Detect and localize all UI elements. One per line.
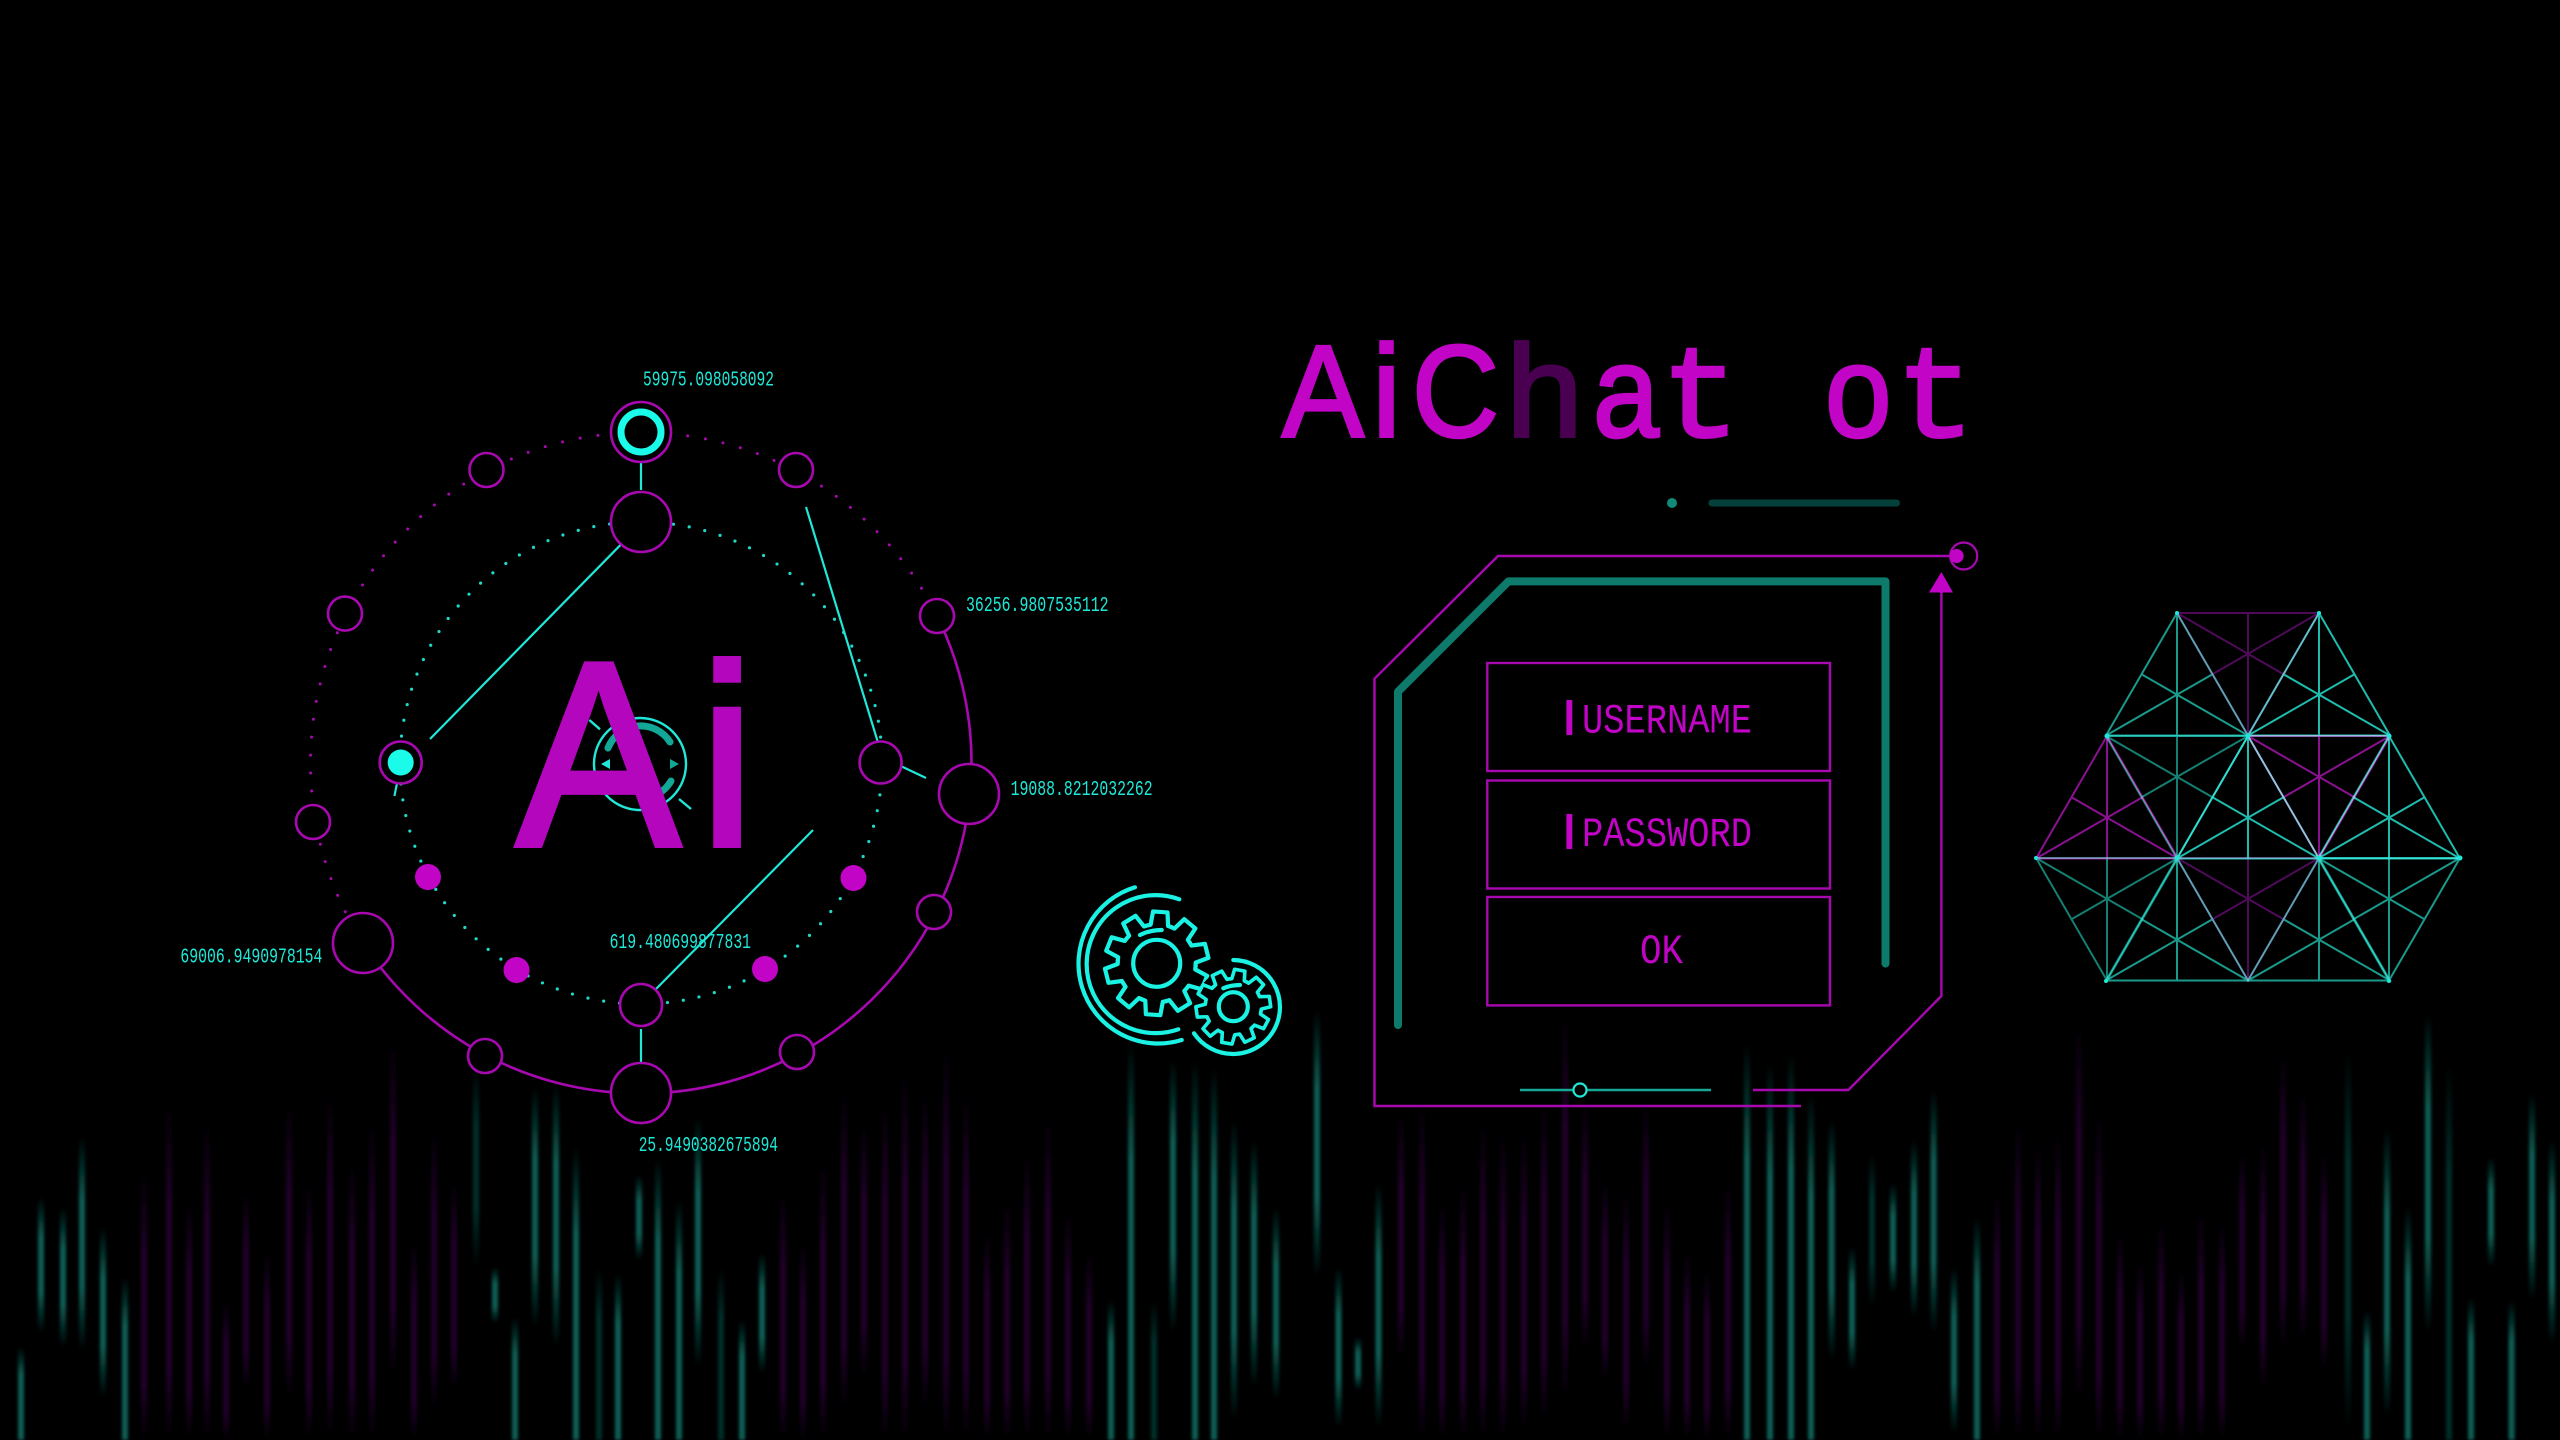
outer dotted ring [310, 432, 937, 943]
accent bar under title [1667, 498, 1900, 508]
panel: radial Ai diagram [180, 370, 1153, 1158]
title: A [1282, 318, 1365, 464]
triangular mesh hexagon [2034, 611, 2462, 983]
title: i [1372, 318, 1401, 464]
connector lines [394, 463, 926, 1063]
title: h [1506, 318, 1583, 464]
outer solid arc [363, 616, 971, 1094]
ok button [1487, 897, 1830, 1005]
data labels: 59975.098058092 [643, 370, 774, 392]
password field [1487, 780, 1830, 888]
inner dotted ring [400, 522, 882, 1004]
panel: login frame [1374, 542, 1977, 1106]
username field: USERNAME [1582, 697, 1752, 745]
central scope widget [589, 718, 691, 810]
data labels: 69006.9490978154 [180, 946, 322, 970]
big Ai text: A [516, 606, 682, 902]
username field [1487, 663, 1830, 771]
title: a [1593, 318, 1659, 464]
data labels [180, 370, 1153, 1158]
title: C [1412, 318, 1499, 464]
data labels: 619.480699877831 [610, 932, 751, 955]
data labels: 25.9490382675894 [639, 1135, 778, 1158]
cyan top ring [621, 412, 661, 452]
title: t [1661, 328, 1740, 476]
data labels: 36256.9807535112 [966, 595, 1109, 618]
arrow head [1929, 572, 1953, 592]
cyan left dot [388, 750, 414, 776]
ok button: OK [1640, 928, 1684, 976]
outer ring nodes [296, 402, 999, 1123]
slider [1520, 1084, 1711, 1096]
outer frame [1374, 556, 1950, 1106]
big Ai text: i [698, 612, 756, 900]
title: o [1825, 318, 1892, 464]
corner node [1950, 542, 1977, 570]
title [1282, 318, 1975, 476]
icon: gears [1079, 887, 1280, 1054]
inner ring nodes [380, 492, 902, 1026]
arrow frame [1753, 590, 1941, 1090]
password field: PASSWORD [1582, 811, 1752, 859]
filled magenta nodes [415, 864, 866, 983]
title: t [1896, 328, 1975, 476]
background: waveform streaks [18, 1010, 2555, 1440]
data labels: 19088.8212032262 [1011, 779, 1153, 802]
teal inner frame [1398, 581, 1886, 1025]
